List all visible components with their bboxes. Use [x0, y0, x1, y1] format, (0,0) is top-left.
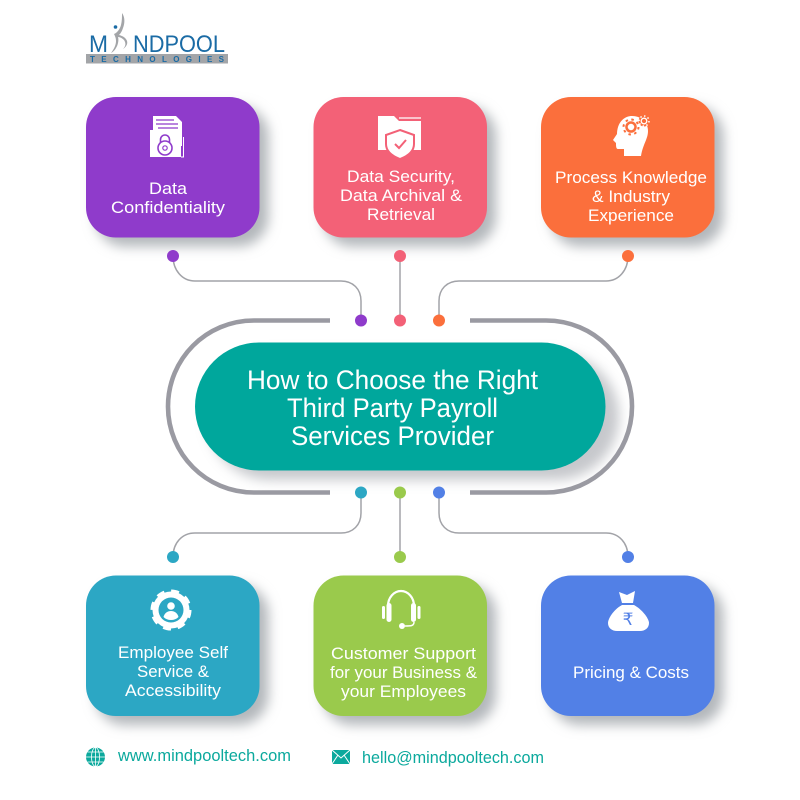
label: Service & [137, 663, 209, 681]
label: Confidentiality [111, 199, 226, 217]
label: Retrieval [367, 206, 435, 224]
panel: employee self service [86, 576, 268, 725]
label: Pricing & Costs [573, 664, 689, 682]
title: How to Choose the Right [247, 365, 538, 395]
icon: folder with shield [378, 116, 421, 159]
connector lines [173, 256, 628, 557]
logo wordmark NDPOOL: NDPOOL [133, 31, 225, 58]
panel: data confidentiality [86, 97, 268, 246]
outer ring left [168, 320, 330, 492]
logo grey strip [86, 54, 228, 64]
panel: process knowledge [541, 97, 724, 246]
icon: gear with person [152, 591, 190, 629]
icon: headset [382, 591, 420, 629]
icon: document and locked folder [150, 116, 184, 157]
logo tagline: TECHNOLOGIES [90, 55, 225, 64]
label: Employee Self [118, 644, 228, 662]
title: Third Party Payroll [287, 393, 498, 423]
panel: customer support [314, 576, 496, 725]
label: & Industry [592, 188, 671, 206]
website text: www.mindpooltech.com [117, 747, 291, 765]
logo: Mindpool Technologies [86, 13, 228, 64]
label: Experience [588, 207, 674, 225]
label [118, 644, 228, 700]
panel: pricing and costs [541, 576, 724, 725]
label [330, 645, 477, 701]
icon: money bag with rupee [608, 591, 649, 631]
label: Data [149, 180, 188, 198]
footer website [86, 747, 291, 766]
logo dot [114, 25, 117, 29]
title [247, 365, 538, 451]
footer email [332, 749, 544, 767]
label: for your Business & [330, 664, 477, 682]
label: Accessibility [125, 682, 222, 700]
panel: data security [314, 97, 496, 246]
label [555, 169, 707, 225]
label [340, 168, 462, 224]
label: Data Security, [347, 168, 455, 186]
email text: hello@mindpooltech.com [362, 749, 544, 767]
logo wordmark M: M [89, 31, 108, 58]
logo figure [111, 13, 127, 53]
icon: head with gears [613, 116, 650, 156]
outer ring right [470, 320, 632, 492]
label [111, 180, 226, 217]
icon: money bag with rupee: ₹ [623, 610, 633, 630]
icon: globe [86, 748, 105, 766]
label: Customer Support [331, 645, 476, 663]
centre pill shadow [207, 353, 619, 480]
icon: envelope [332, 750, 350, 764]
label: Process Knowledge [555, 169, 707, 187]
title: Services Provider [291, 421, 494, 451]
label: Data Archival & [340, 187, 462, 205]
label: your Employees [341, 683, 466, 701]
centre pill with title [195, 342, 606, 470]
connector dots [167, 250, 634, 563]
